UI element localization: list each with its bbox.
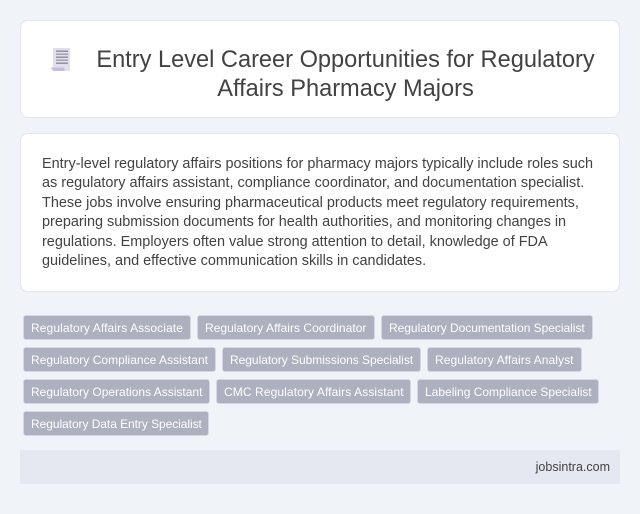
- tag: [197, 315, 375, 340]
- title: Entry Level Career Opportunities for Regulatory: [96, 47, 595, 73]
- tag: [216, 379, 411, 404]
- description text: Entry-level regulatory affairs positions for pharmacy majors typically include roles such: [42, 156, 593, 172]
- job role tags: [23, 315, 599, 436]
- tag: Regulatory Affairs Analyst: [435, 353, 574, 367]
- tag: Regulatory Data Entry Specialist: [31, 417, 202, 431]
- title: [96, 47, 595, 102]
- description text: preparing submission documents for health authorities, and monitoring changes in: [42, 214, 566, 230]
- tag: [23, 411, 209, 436]
- description text: guidelines, and effective communication skills in candidates.: [42, 253, 426, 269]
- tag: [417, 379, 599, 404]
- tag: [381, 315, 593, 340]
- description text: as regulatory affairs assistant, compliance coordinator, and documentation specialist.: [42, 175, 584, 191]
- tag: Regulatory Submissions Specialist: [230, 353, 413, 367]
- icon: document scroll: [51, 48, 70, 71]
- description text: regulations. Employers often value strong attention to detail, knowledge of FDA: [42, 234, 548, 250]
- description text: [42, 156, 593, 269]
- description panel: [20, 133, 620, 292]
- tag: Regulatory Affairs Coordinator: [205, 321, 366, 335]
- footer bar: [20, 450, 620, 484]
- description text: These jobs involve ensuring pharmaceutical products meet regulatory requirements,: [42, 195, 579, 211]
- tag: [427, 347, 582, 372]
- tag: Regulatory Compliance Assistant: [31, 353, 208, 367]
- tag: [23, 315, 191, 340]
- footer source text: jobsintra.com: [536, 460, 610, 474]
- tag: [222, 347, 421, 372]
- title: Affairs Pharmacy Majors: [217, 76, 474, 102]
- header panel: [20, 20, 620, 118]
- tag: Regulatory Affairs Associate: [31, 321, 183, 335]
- tag: [23, 347, 216, 372]
- tag: Regulatory Operations Assistant: [31, 385, 202, 399]
- tag: [23, 379, 210, 404]
- tag: Labeling Compliance Specialist: [425, 385, 592, 399]
- tag: CMC Regulatory Affairs Assistant: [224, 385, 404, 399]
- tag: Regulatory Documentation Specialist: [389, 321, 585, 335]
